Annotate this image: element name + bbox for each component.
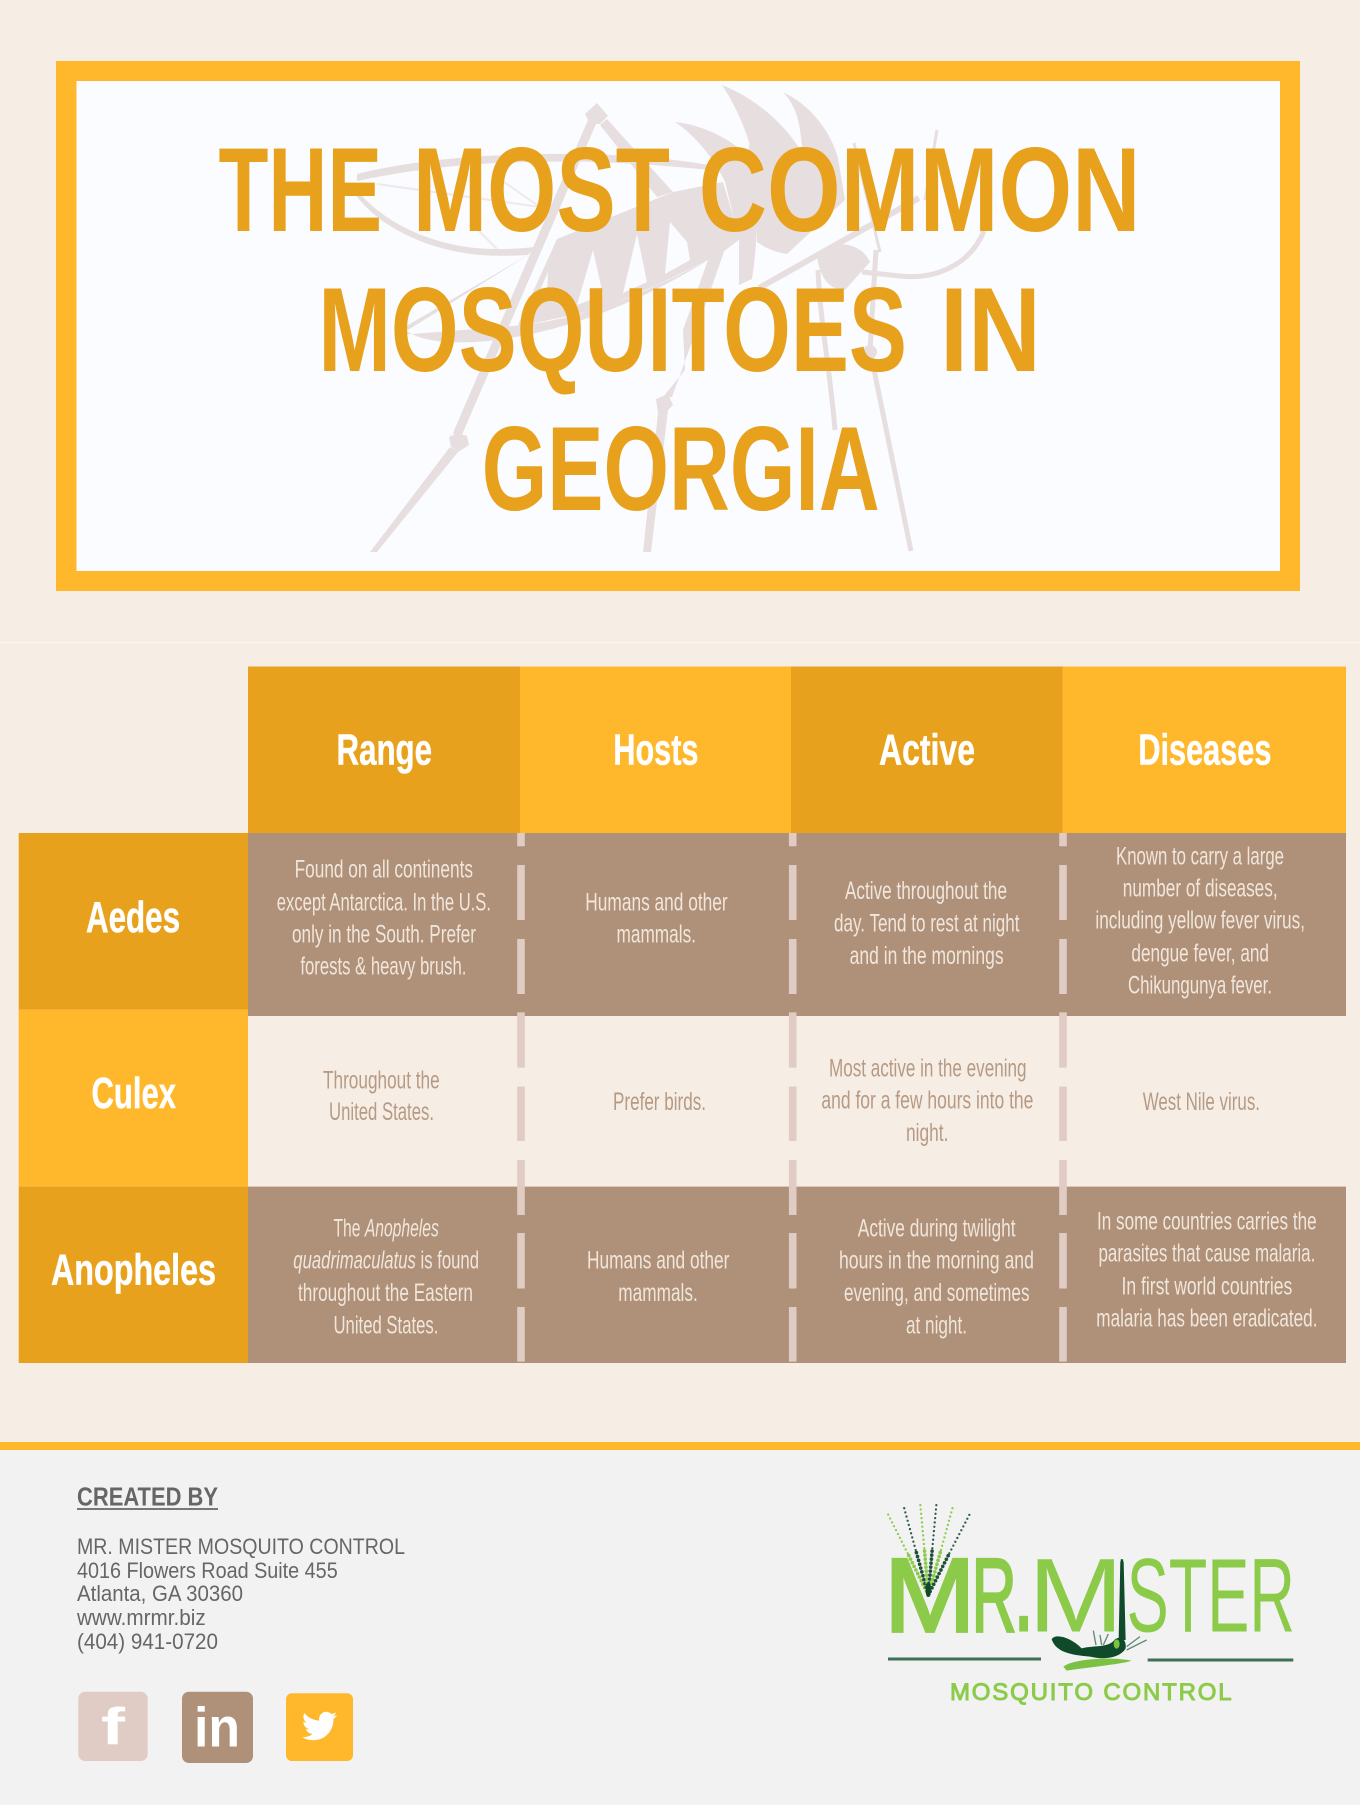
logo: rule lines [888,1659,1293,1660]
logo tagline: MOSQUITO CONTROL [950,1679,1232,1706]
text block: contact details [76,1534,405,1654]
row header: Anopheles [19,1187,248,1363]
cell: Anopheles diseases: In first world countries [1122,1273,1292,1301]
logo: mosquito [1052,1562,1147,1671]
cell: Aedes hosts: Humans and other [585,888,728,916]
column header: Active [791,666,1062,833]
title: IN [940,263,1041,397]
column header: Range: Range [336,726,432,775]
logo wordmark: . [1015,1538,1032,1655]
cell: Anopheles active: hours in the morning and [839,1247,1034,1275]
cell: Culex active: night. [906,1119,948,1147]
cell: Anopheles range [293,1215,479,1339]
cell: Culex active: Most active in the evening [829,1055,1026,1083]
cell: Anopheles active [839,1215,1034,1339]
cell: Aedes diseases: number of diseases, [1123,874,1278,902]
cell: Anopheles active: at night. [906,1311,967,1339]
row header: Aedes: Aedes [86,893,180,942]
title: THE [218,123,382,257]
cell: Aedes hosts [585,888,728,949]
cell: Aedes hosts: mammals. [616,921,696,949]
cell: Anopheles hosts [587,1247,729,1307]
cell: Anopheles active: Active during twilight [858,1215,1016,1243]
logo: spray fan [887,1502,971,1595]
heading: created by: CREATED BY [77,1482,218,1512]
cell: Aedes active [834,877,1020,970]
text block: contact details: www.mrmr.biz [76,1605,206,1630]
cell: Anopheles active: evening, and sometimes [844,1279,1030,1307]
cell: Aedes active: day. Tend to rest at night [834,910,1020,938]
logo wordmark: I [1118,1538,1126,1655]
cell: Aedes diseases [1095,843,1305,1000]
text block: contact details: Atlanta, GA 30360 [77,1581,243,1606]
logo wordmark: M [884,1538,976,1655]
cell: Culex range [323,1066,440,1126]
cell: Anopheles range: throughout the Eastern [298,1279,473,1307]
panel: footer [0,1442,1360,1805]
cell: Culex range: Throughout the [323,1066,440,1094]
column header: Range [248,666,520,833]
icon: facebook: f [101,1698,126,1756]
cell: Culex active [821,1055,1033,1147]
icon: mosquito watermark [352,85,984,552]
title: GEORGIA [482,402,880,536]
title: MOST [413,123,670,257]
column header: Active: Active [879,726,975,775]
logo wordmark: R [972,1538,1017,1655]
cell: Culex hosts: Prefer birds. [613,1088,706,1116]
cell: Culex range: United States. [329,1098,434,1126]
cell: Aedes range: except Antarctica. In the U.S. [277,888,491,916]
cell: Aedes active: Active throughout the [845,877,1007,905]
row header: Culex [19,1010,248,1187]
title: MOSQUITOES [318,263,907,397]
cell: Aedes active: and in the mornings [850,942,1004,970]
cell: Aedes range: Found on all continents [295,856,473,884]
icon: linkedin: in [194,1696,240,1759]
cell: Aedes range [277,856,491,981]
cell: Culex active: and for a few hours into the [821,1087,1033,1115]
text block: contact details: (404) 941-0720 [77,1629,218,1654]
row header: Aedes [19,833,248,1010]
panel: title frame [56,61,1300,591]
cell: Anopheles hosts: mammals. [618,1279,698,1307]
icon: linkedin [182,1692,253,1763]
logo wordmark: M [1028,1538,1123,1655]
cell: Aedes range: only in the South. Prefer [292,921,476,949]
cell: Anopheles diseases [1096,1208,1318,1333]
row band: Aedes [248,833,1346,1016]
icon: twitter [286,1693,353,1761]
cell: Anopheles range: quadrimaculatus is found [293,1247,479,1275]
cell: Aedes range: forests & heavy brush. [300,953,466,981]
column header: Hosts: Hosts [613,726,698,775]
title: COMMON [699,123,1141,257]
icon: facebook [78,1692,148,1761]
column header: Hosts [520,666,791,833]
column header: Diseases [1062,666,1346,833]
logo: Mr. Mister Mosquito Control [884,1502,1295,1706]
logo wordmark [884,1538,1295,1655]
cell: Aedes diseases: dengue fever, and [1131,940,1269,968]
column header: Diseases: Diseases [1138,726,1271,775]
cell: Anopheles hosts: Humans and other [587,1247,729,1275]
row header: Culex: Culex [92,1069,176,1118]
title [218,123,1141,536]
cell: Culex diseases: West Nile virus. [1143,1088,1260,1116]
panel: comparison table [19,666,1346,1363]
cell: Anopheles range: The Anopheles [334,1215,439,1243]
cell: Aedes diseases: Known to carry a large [1116,843,1284,871]
text block: contact details: MR. MISTER MOSQUITO CONTROL [77,1534,405,1559]
row header: Anopheles: Anopheles [51,1246,216,1295]
row band: Anopheles [248,1187,1346,1363]
cell: Anopheles range: United States. [334,1311,438,1339]
cell: Aedes diseases: Chikungunya fever. [1128,972,1272,1000]
text block: contact details: 4016 Flowers Road Suite 455 [77,1558,338,1583]
